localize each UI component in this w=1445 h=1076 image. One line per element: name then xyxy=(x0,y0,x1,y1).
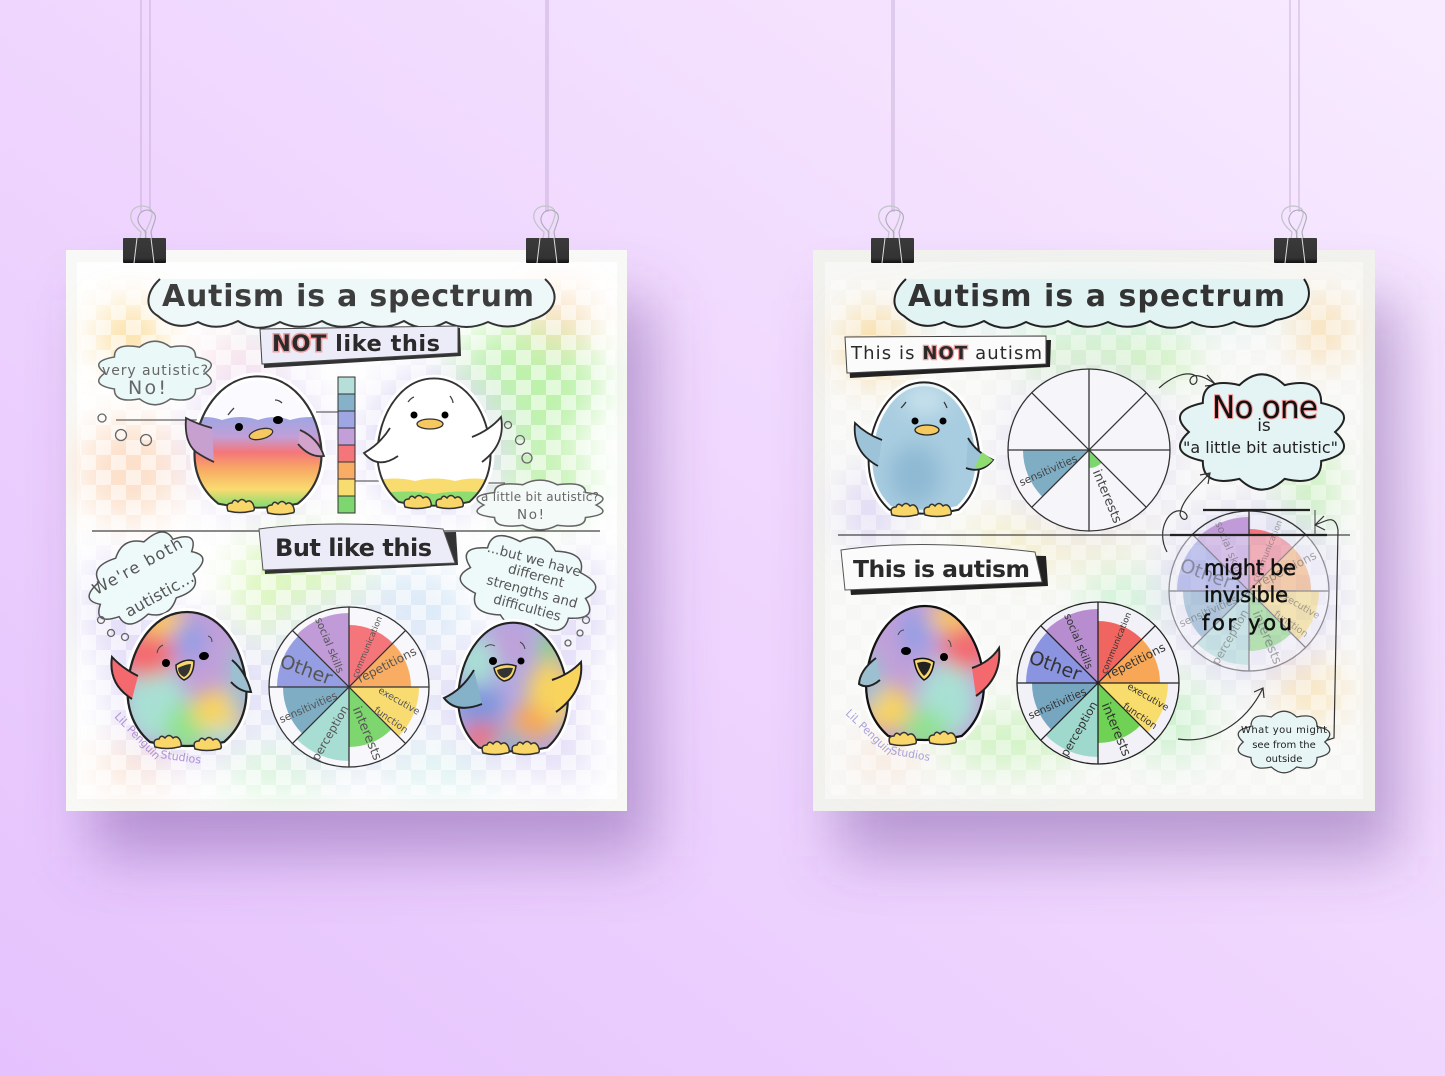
pie chart: autism traits left: sensitivities xyxy=(278,690,339,726)
paper left xyxy=(66,250,627,811)
watercolour background right xyxy=(830,280,1360,795)
poster: left xyxy=(66,250,627,811)
cloud: a little bit autistic: No! xyxy=(517,507,544,523)
spectrum bar xyxy=(338,377,355,513)
pie chart: only two traits: sensitivities xyxy=(1018,453,1079,489)
arrow: curly to no one cloud xyxy=(1159,374,1216,388)
pie chart: might be invisible: executive xyxy=(1276,589,1322,622)
watermark left: LiL Penguin xyxy=(112,710,163,762)
pie chart: might be invisible: social skills xyxy=(1212,520,1246,579)
pie chart: only two traits: interests xyxy=(1089,468,1124,526)
arrow: pie to outside view xyxy=(1178,688,1264,740)
pie chart: autism traits left: social skills xyxy=(312,616,346,675)
thought bubbles right xyxy=(504,422,532,463)
cloud: No one is a little bit autistic: "a little bit autistic" xyxy=(1183,438,1338,457)
cloud: different strengths and difficulties: difficulties xyxy=(491,591,563,625)
poster shadows xyxy=(92,300,1398,856)
heading: This is autism: This is autism xyxy=(853,555,1030,583)
pie chart: autism traits left: communication xyxy=(351,615,385,680)
pie chart: might be invisible: interests xyxy=(1249,609,1284,667)
penguin: mixed colours xyxy=(858,600,999,750)
binder clips xyxy=(123,206,1317,263)
pie chart: autism traits right: Other xyxy=(1026,646,1084,686)
arrow: outside cloud to invisible pie xyxy=(1315,516,1338,742)
cloud: different strengths and difficulties xyxy=(451,521,605,645)
cloud: what you might see from the outside xyxy=(1238,711,1330,773)
watermark right: Studios xyxy=(889,744,931,764)
text: might be invisible for you: might be xyxy=(1204,556,1296,580)
watermark left: Studios xyxy=(160,748,202,767)
pie chart: autism traits right xyxy=(1017,602,1179,764)
pie chart: autism traits left: perception xyxy=(309,703,351,763)
heading: But like this xyxy=(259,524,458,574)
pie chart: might be invisible: function xyxy=(1272,609,1310,640)
penguin: mixed colours right xyxy=(444,615,581,760)
text: might be invisible for you xyxy=(1202,556,1296,635)
pie chart: autism traits right: executive xyxy=(1125,681,1171,714)
pie chart: autism traits left: function xyxy=(372,705,410,736)
cloud: a little bit autistic xyxy=(477,480,603,530)
cloud: what you might see from the outside: see from the xyxy=(1252,740,1316,751)
cloud: very autistic: No! xyxy=(128,377,166,399)
pie chart: autism traits right: interests xyxy=(1098,701,1133,759)
cloud: we're both autistic xyxy=(75,514,217,642)
cloud: very autistic xyxy=(99,341,211,405)
title cloud right xyxy=(894,279,1309,328)
divider right xyxy=(838,534,1350,536)
heading: This is autism xyxy=(841,544,1048,595)
title cloud right: Autism is a spectrum xyxy=(908,279,1285,314)
pie chart: might be invisible: perception xyxy=(1209,607,1251,667)
heading: This is NOT autism xyxy=(845,336,1051,378)
pie chart: autism traits right: repetitions xyxy=(1104,640,1168,682)
heading: This is NOT autism: This is NOT autism xyxy=(850,343,1042,364)
pie chart: might be invisible: Other xyxy=(1177,554,1235,594)
poster: right xyxy=(813,250,1375,811)
cloud: a little bit autistic: a little bit autistic? xyxy=(481,490,599,504)
watermark left xyxy=(112,710,202,767)
divider left xyxy=(92,530,600,532)
pie chart: autism traits right: perception xyxy=(1058,699,1100,759)
thought bubbles and pointer line xyxy=(98,412,505,483)
cloud: No one is a little bit autistic: is xyxy=(1257,416,1271,436)
pie chart: autism traits right: communication xyxy=(1100,611,1134,676)
pie chart: might be invisible: sensitivities xyxy=(1178,594,1239,630)
pie chart: autism traits left xyxy=(269,607,429,767)
heading: NOT like this xyxy=(260,326,461,368)
pie chart: autism traits right: function xyxy=(1121,701,1159,732)
arrow: loop to no one cloud xyxy=(1163,473,1210,552)
cloud: different strengths and difficulties: ...but we have xyxy=(485,540,583,580)
heading: But like this: But like this xyxy=(275,534,432,562)
cloud: we're both autistic: We're both xyxy=(89,534,186,599)
cloud: No one is a little bit autistic xyxy=(1180,374,1344,490)
penguin: mixed colours left xyxy=(110,608,252,752)
pie chart: autism traits right: sensitivities xyxy=(1027,686,1088,722)
title cloud left xyxy=(148,279,555,328)
pie chart: autism traits left: repetitions xyxy=(355,644,419,686)
watermark right: LiL Penguin xyxy=(843,707,895,758)
pie chart: might be invisible: communication xyxy=(1251,519,1285,584)
pie chart: autism traits left: Other xyxy=(277,650,335,690)
cloud: different strengths and difficulties: strengths and xyxy=(485,572,579,612)
text: might be invisible for you: for you xyxy=(1202,611,1292,635)
pie chart: autism traits left: interests xyxy=(349,705,384,763)
pie chart: only two traits xyxy=(1008,369,1170,531)
pie chart: autism traits right: social skills xyxy=(1061,612,1095,671)
title cloud left: Autism is a spectrum xyxy=(162,279,534,314)
cloud: very autistic: very autistic? xyxy=(102,363,208,379)
pie chart: autism traits left: executive xyxy=(376,685,422,718)
penguin: rainbow bands xyxy=(186,376,330,515)
watermark right xyxy=(843,707,931,764)
text: might be invisible for you: invisible xyxy=(1204,583,1288,607)
thought bubbles bottom right xyxy=(565,616,590,646)
penguin: blue xyxy=(855,382,993,516)
cloud: what you might see from the outside: outside xyxy=(1266,754,1302,765)
cloud: different strengths and difficulties: different xyxy=(506,561,566,591)
hanging strings xyxy=(141,0,1299,212)
heading: NOT like this: NOT like this xyxy=(272,331,440,357)
pie chart: might be invisible: repetitions xyxy=(1255,548,1319,590)
cloud: No one is a little bit autistic: No one xyxy=(1212,390,1318,426)
thought bubbles bottom left xyxy=(98,616,128,640)
cloud: what you might see from the outside: What you might xyxy=(1241,725,1327,736)
pie chart: might be invisible xyxy=(1169,510,1329,671)
penguin: white with yellow and green base xyxy=(364,378,502,515)
watercolour background left xyxy=(80,280,615,795)
paper right xyxy=(813,250,1375,811)
cloud: we're both autistic: autistic... xyxy=(121,567,197,621)
